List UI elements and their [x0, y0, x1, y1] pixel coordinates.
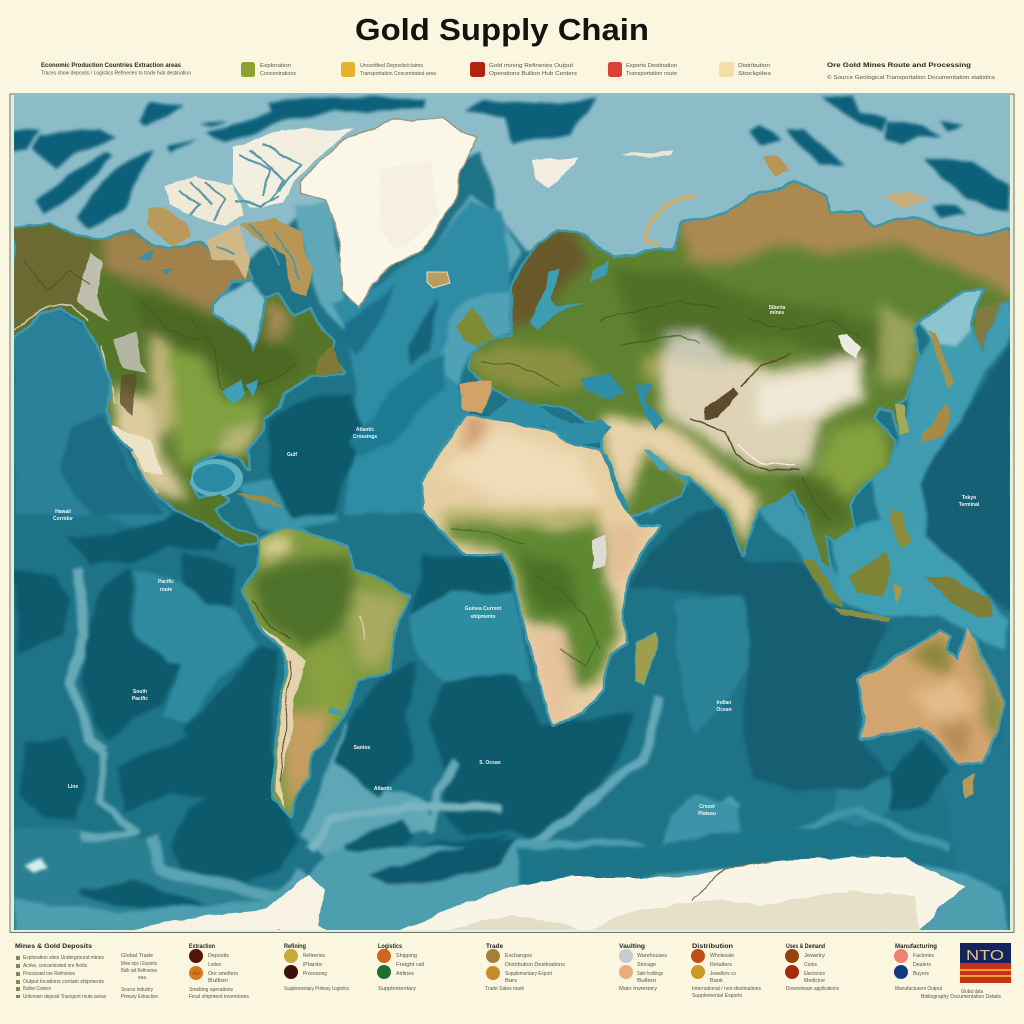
ocean labels: South [133, 689, 147, 695]
coastal shelf halo [14, 183, 1012, 817]
ocean labels: Pacific [132, 696, 148, 702]
legend block: Markets: Buyers [913, 971, 930, 977]
ocean labels: Corridor [53, 516, 73, 522]
continent: Australia [859, 627, 1008, 797]
legend item: cream [719, 62, 772, 77]
mediterranean [487, 398, 612, 444]
Philippines [890, 510, 912, 550]
legend item: green [241, 62, 297, 77]
legend item: red: Operations Bullion Hub Centers [489, 71, 578, 77]
ocean labels: shipments [470, 614, 496, 620]
legend block: Logistics: Airlines [396, 971, 415, 977]
title: Gold Supply Chain [355, 12, 649, 47]
ocean labels: Guinea Current [465, 606, 502, 612]
legend block: gold deposits [15, 943, 106, 1000]
legend block: Extraction: Bullion [208, 978, 228, 984]
legend note right: © Source Geological Transportation Documentation statistics [827, 74, 996, 81]
inland seas [487, 262, 672, 512]
legend intro text [41, 62, 191, 76]
Novaya Zemlya [645, 195, 692, 247]
black sea [580, 373, 624, 400]
legend block: Markets: Factories [913, 953, 935, 959]
legend block: Vaults: Bullion [637, 978, 656, 984]
northern lakes [136, 250, 172, 275]
arctic deep pools [14, 95, 1010, 228]
ocean labels: route [160, 587, 172, 593]
legend block: Vaults [619, 943, 668, 992]
legend block: Markets [894, 943, 943, 992]
credit text: Bibliography Documentation Details [921, 994, 1001, 1000]
legend intro text: Traces show deposits / Logistics Refineries to trade hub destination [41, 70, 191, 76]
legend block: Uses: Coins [804, 962, 817, 968]
legend block: Logistics: Freight rail [396, 962, 424, 968]
legend block: Trade: Trade [486, 943, 503, 950]
southern ocean shelf [14, 790, 1012, 935]
legend block: Logistics: Supplementary [378, 986, 417, 992]
legend block: Distribution: Wholesale [710, 953, 734, 959]
flag emblem [960, 943, 1011, 983]
legend block: notes column: Global Trade [121, 953, 153, 959]
New Siberian Islands [882, 193, 929, 207]
credit text: Global data [961, 989, 983, 995]
Severnaya Zemlya [762, 157, 789, 177]
light ocean ridges [68, 570, 950, 900]
ocean labels: Hawaii [55, 509, 72, 515]
legend block: Extraction: Deposits [208, 953, 230, 959]
legend note right [827, 62, 996, 81]
legend block: gold deposits: Output locations contain shipments [23, 979, 105, 985]
Sulawesi [892, 585, 903, 603]
legend block: Distribution: Distribution [692, 943, 733, 950]
ocean labels: Siberia [769, 305, 786, 311]
legend block: Uses: Electronics [804, 971, 825, 977]
legend block: Extraction: Lodes [208, 962, 221, 968]
legend item: coral [608, 62, 677, 77]
Iceland [427, 272, 450, 288]
flag emblem: NTO [966, 947, 1004, 964]
ocean labels [53, 305, 980, 817]
legend block: notes column: sea [138, 975, 146, 981]
legend block: Markets: Manufacturers Output [895, 986, 943, 992]
Borneo [849, 550, 892, 597]
legend block: Refining [284, 943, 349, 992]
Svalbard [532, 158, 579, 188]
legend block: Uses [785, 943, 839, 992]
top legend [41, 62, 996, 81]
legend block: Extraction: Ore smelters [208, 971, 239, 977]
Sakhalin [927, 330, 955, 390]
legend item: amber: Uncertified Deposits/claims [360, 63, 424, 69]
ocean base [14, 94, 1010, 930]
legend block: gold deposits: Exploration sites Underground mines [23, 955, 104, 961]
ocean labels: Crozet [699, 804, 715, 810]
legend item: red: Gold mining Refineries Output [489, 63, 574, 69]
islands: Asia and Pacific [132, 150, 992, 622]
legend block: Uses: Medicine [804, 978, 825, 984]
legend block: Extraction: Final shipment inventories [189, 994, 250, 1000]
credit text [921, 989, 1001, 1000]
legend block: notes column: Bulk rail Refineries [121, 968, 157, 974]
Franz Josef Land [619, 150, 672, 157]
legend block: Vaults: Main Inventory [619, 986, 658, 992]
legend block: Vaults: Warehouses [637, 953, 668, 959]
legend block: Distribution [691, 943, 761, 999]
ocean labels: Tokyo [962, 495, 976, 501]
ocean labels: Gulf [287, 452, 297, 458]
legend block: Trade: Supplementary Export [505, 971, 553, 977]
legend item: coral: Transportation route [626, 71, 677, 77]
legend block: Distribution: Retailers [710, 962, 733, 968]
gulf of mexico [189, 459, 243, 497]
legend block: Trade: Bars [505, 978, 518, 984]
Java [832, 607, 892, 622]
red sea [601, 455, 630, 512]
legend block: Logistics [377, 943, 424, 992]
legend block: Distribution: Supplemental Exports [692, 993, 743, 999]
legend item: amber [341, 62, 436, 77]
ocean labels: Crossings [353, 434, 377, 440]
deep ocean basins [14, 95, 1010, 910]
ocean labels: Ocean [716, 707, 732, 713]
legend block: Distribution: Jewellers co [710, 971, 736, 977]
legend block: Trade: Trade Sales mark [485, 986, 524, 992]
persian gulf [642, 450, 672, 472]
legend block: Extraction: Smelting operations [189, 987, 233, 993]
legend block: Refining: Refining [284, 943, 306, 950]
legend block: Logistics: Logistics [378, 943, 402, 950]
ocean labels: Line [68, 784, 78, 790]
Japan [915, 403, 952, 453]
legend block: notes column [121, 953, 158, 1000]
legend block: Vaults: Vaulting [619, 943, 645, 950]
legend block: gold deposits: Unknown deposit Transport route areas [23, 994, 106, 1000]
great lakes [222, 378, 258, 405]
ocean labels: Atlantic [356, 427, 374, 433]
legend block: Logistics: Shipping [396, 953, 417, 959]
ocean labels: Terminal [959, 502, 980, 508]
Sumatra [802, 557, 842, 607]
bottom legend [15, 943, 1011, 1000]
legend block: Trade: Exchanges [505, 953, 533, 959]
legend item: green: Concentrations [260, 71, 297, 77]
legend block: Uses: Downstream applications [786, 986, 839, 992]
ocean labels: Atlantic [374, 786, 392, 792]
legend block: gold deposits: Processed ore Refineries [23, 971, 75, 977]
legend block: gold deposits: Active, concentrated ore fields [23, 963, 87, 969]
ocean labels: Indian [717, 700, 731, 706]
ocean labels: Santos [354, 745, 371, 751]
legend block: Uses: Jewelry [804, 953, 826, 959]
continent: Antarctica [125, 857, 965, 932]
legend block: gold deposits: Mines & Gold Deposits [15, 943, 93, 950]
ocean labels: S. Ocean [479, 760, 501, 766]
Newfoundland [315, 345, 343, 375]
arctic archipelago [147, 128, 353, 298]
continent: Greenland [300, 120, 477, 307]
legend block: Refining: Plants [303, 962, 323, 968]
legend block: Markets: Dealers [913, 962, 932, 968]
continent: South America [243, 527, 408, 817]
legend block: Refining: Refineries [303, 953, 325, 959]
ocean labels: Pacific [158, 579, 174, 585]
continent: Eurasia [465, 175, 1020, 567]
legend block: Extraction [189, 943, 250, 1000]
Madagascar [635, 633, 657, 687]
baltic [532, 268, 585, 330]
legend block: notes column: Mine ops / Exports [121, 961, 157, 967]
continent: Africa [423, 415, 659, 723]
legend block: Distribution: Bank [710, 978, 724, 984]
legend intro text: Economic Production Countries Extraction areas [41, 62, 181, 69]
legend block: Distribution: International / non-destinations [692, 986, 761, 992]
legend item: coral: Exports Destination [626, 63, 677, 69]
caspian [635, 383, 664, 430]
legend block: Extraction: Extraction [189, 943, 215, 950]
ocean labels: Plateau [698, 811, 716, 817]
mid-tone pacific and atlantic shelves [133, 573, 257, 723]
legend block: Vaults: Storage [637, 962, 656, 968]
Baja California [132, 452, 157, 492]
continent: Iberia, UK [457, 307, 493, 413]
ocean labels: mines [770, 310, 784, 316]
legend block: Refining: Supplementary Primary Logistics [284, 986, 349, 992]
legend block: Refining: Processing [303, 971, 327, 977]
legend block: Extraction: Au [192, 971, 200, 977]
legend block: Vaults: Safe holdings [637, 971, 663, 977]
New Guinea [925, 577, 992, 617]
Cuba [235, 494, 285, 507]
legend block: notes column: Primary Extraction [121, 994, 158, 1000]
legend block: Markets: Manufacturing [895, 943, 937, 950]
legend block: Trade [485, 943, 566, 992]
legend item: red [470, 62, 578, 77]
legend item: cream: Stockpiles [738, 71, 772, 77]
legend item: amber: Transportation Concentrated area [360, 71, 436, 77]
legend block: notes column: Source Industry [121, 987, 153, 993]
legend block: Uses: Uses & Demand [786, 943, 825, 950]
legend block: gold deposits: Bullion Centers [23, 986, 51, 992]
legend note right: Ore Gold Mines Route and Processing [827, 62, 971, 69]
continent: North America [0, 220, 343, 546]
Korea [895, 403, 909, 436]
legend block: Trade: Distribution Destinations [505, 962, 566, 968]
legend item: cream: Distribution [738, 63, 770, 69]
legend item: green: Exploration [260, 63, 291, 69]
